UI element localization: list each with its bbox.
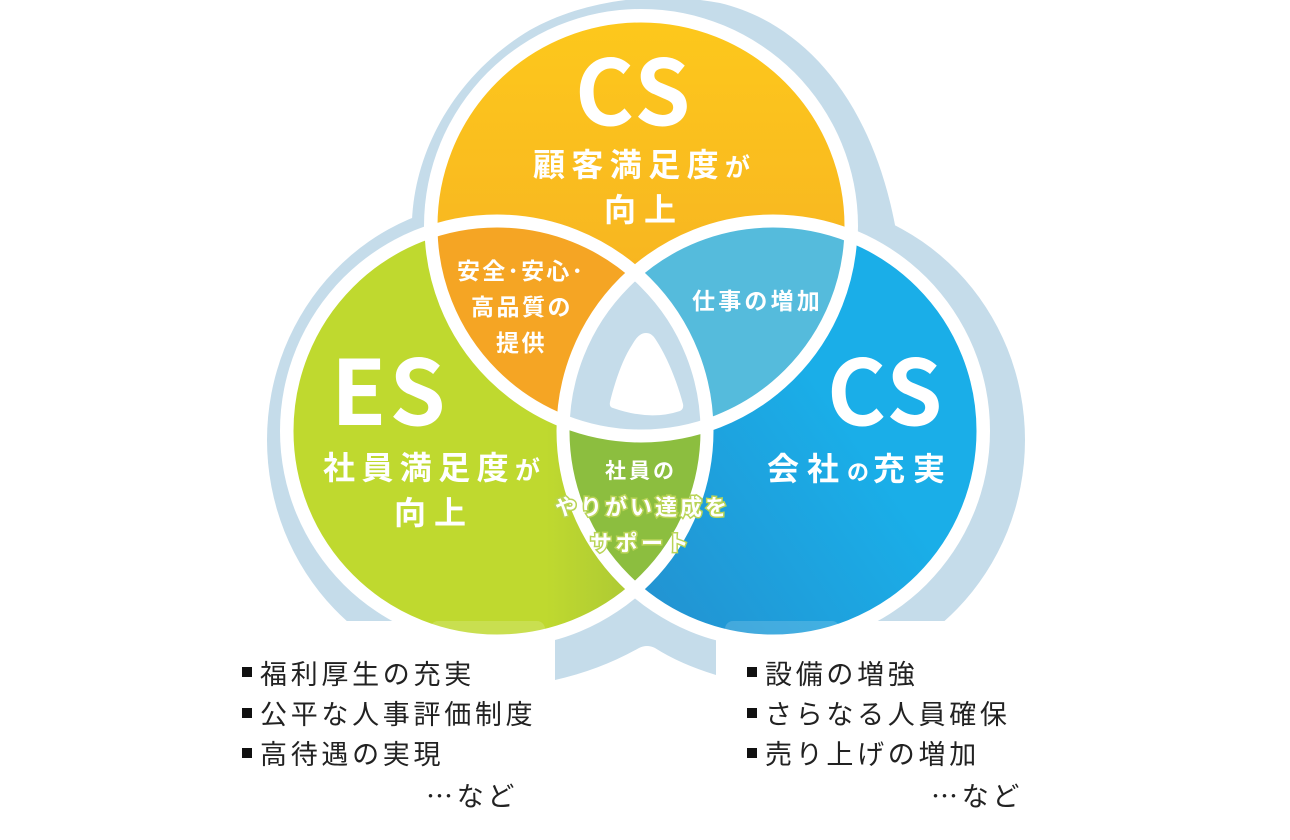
white ring strokes: [287, 16, 983, 641]
label: orange overlap: 安全･安心･: [457, 252, 583, 286]
center white triangle: [610, 333, 683, 415]
heading: ES: ES: [331, 321, 449, 451]
list: employee benefits: 福利厚生の充実: [260, 653, 475, 692]
heading: CS right: CS: [827, 321, 945, 451]
center triple overlap: [570, 282, 700, 430]
label: orange overlap: 提供: [496, 324, 547, 358]
circle: ES green: [293, 227, 701, 635]
list: employee benefits: …など: [426, 775, 518, 814]
label: orange overlap: 高品質の: [471, 288, 573, 322]
list: employee benefits: [242, 653, 536, 814]
label: company fulfilment: 会社の充実: [767, 444, 953, 490]
label: employee satisfaction: 社員満足度が: [323, 443, 546, 489]
heading: CS top: CS: [575, 21, 693, 151]
label: orange overlap: [457, 252, 583, 358]
white circle bases: [280, 9, 990, 648]
circle: CS blue: [569, 227, 977, 635]
venn diagram infographic: [242, 0, 1025, 808]
background halo: [267, 0, 1025, 680]
list: employee benefits: 公平な人事評価制度: [260, 693, 536, 732]
list: company benefits: さらなる人員確保: [765, 693, 1011, 732]
list: company benefits: 設備の増強: [765, 653, 918, 692]
label: green overlap: やりがい達成を: [555, 490, 730, 522]
label: green overlap: [555, 455, 730, 558]
list: employee benefits: 高待遇の実現: [260, 733, 444, 772]
list: company benefits: [747, 653, 1023, 814]
overlap: light blue: [644, 228, 844, 416]
label: improve top: 向上: [604, 185, 684, 231]
list: company benefits: 売り上げの増加: [765, 733, 980, 772]
soft highlights at circle bottoms: [430, 621, 840, 637]
overlap: orange: [438, 228, 625, 388]
list: company benefits: …など: [931, 775, 1023, 814]
label: light blue overlap: 仕事の増加: [692, 282, 823, 316]
label: customer satisfaction: 顧客満足度が: [533, 140, 756, 186]
label: green overlap: 社員の: [605, 455, 677, 485]
circle: CS orange: [437, 22, 845, 430]
label: green overlap: サポート: [590, 526, 692, 558]
label: improve left: 向上: [394, 488, 474, 534]
overlap: green: [570, 430, 700, 580]
